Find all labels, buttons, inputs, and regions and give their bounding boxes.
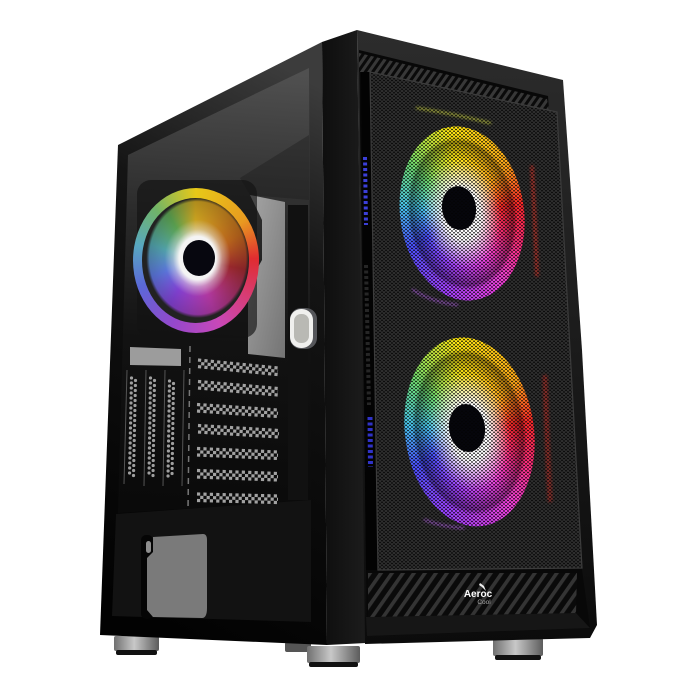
bottom vent stripes (368, 573, 577, 617)
side frame (100, 42, 327, 645)
motherboard tray plate (248, 195, 285, 358)
back foot (285, 642, 311, 652)
right foot (493, 638, 543, 660)
side fan hub (183, 240, 215, 276)
AeroCool logo: Aeroc (464, 589, 493, 600)
side fan inner blades (142, 198, 249, 323)
vertical PCIe slots (130, 378, 174, 478)
panel: front bezel (357, 30, 597, 644)
hard drive plate (141, 534, 207, 619)
expansion plate (130, 347, 181, 366)
rear chamber shadow (240, 135, 309, 200)
AeroCool logo (464, 583, 493, 606)
fan frame (137, 180, 257, 338)
rear side bracket (288, 205, 308, 500)
icon: side RGB fan ring (133, 188, 259, 333)
panel: tempered glass side (100, 42, 327, 645)
panel: front pillar (322, 30, 366, 645)
top front fan glow (388, 118, 536, 309)
mesh base (370, 72, 582, 570)
perforated mesh (370, 72, 582, 570)
middle foot (307, 646, 360, 667)
bottom bezel lip (366, 613, 590, 636)
bezel outer (357, 30, 597, 644)
mesh outline (370, 72, 582, 570)
top vent stripes (359, 53, 549, 110)
fan reflections (413, 108, 550, 528)
blue-lit side strip (361, 72, 378, 570)
PSU shroud (112, 500, 311, 622)
bezel recess (359, 50, 590, 636)
slot frame lines (124, 346, 190, 510)
glass window (118, 68, 311, 513)
AeroCool logo: Cool (477, 599, 491, 606)
left foot (114, 636, 159, 655)
horizontal expansion slots (197, 360, 279, 502)
fan hubs (439, 184, 488, 454)
bottom front fan glow (392, 329, 547, 535)
thumb knob (290, 308, 317, 349)
